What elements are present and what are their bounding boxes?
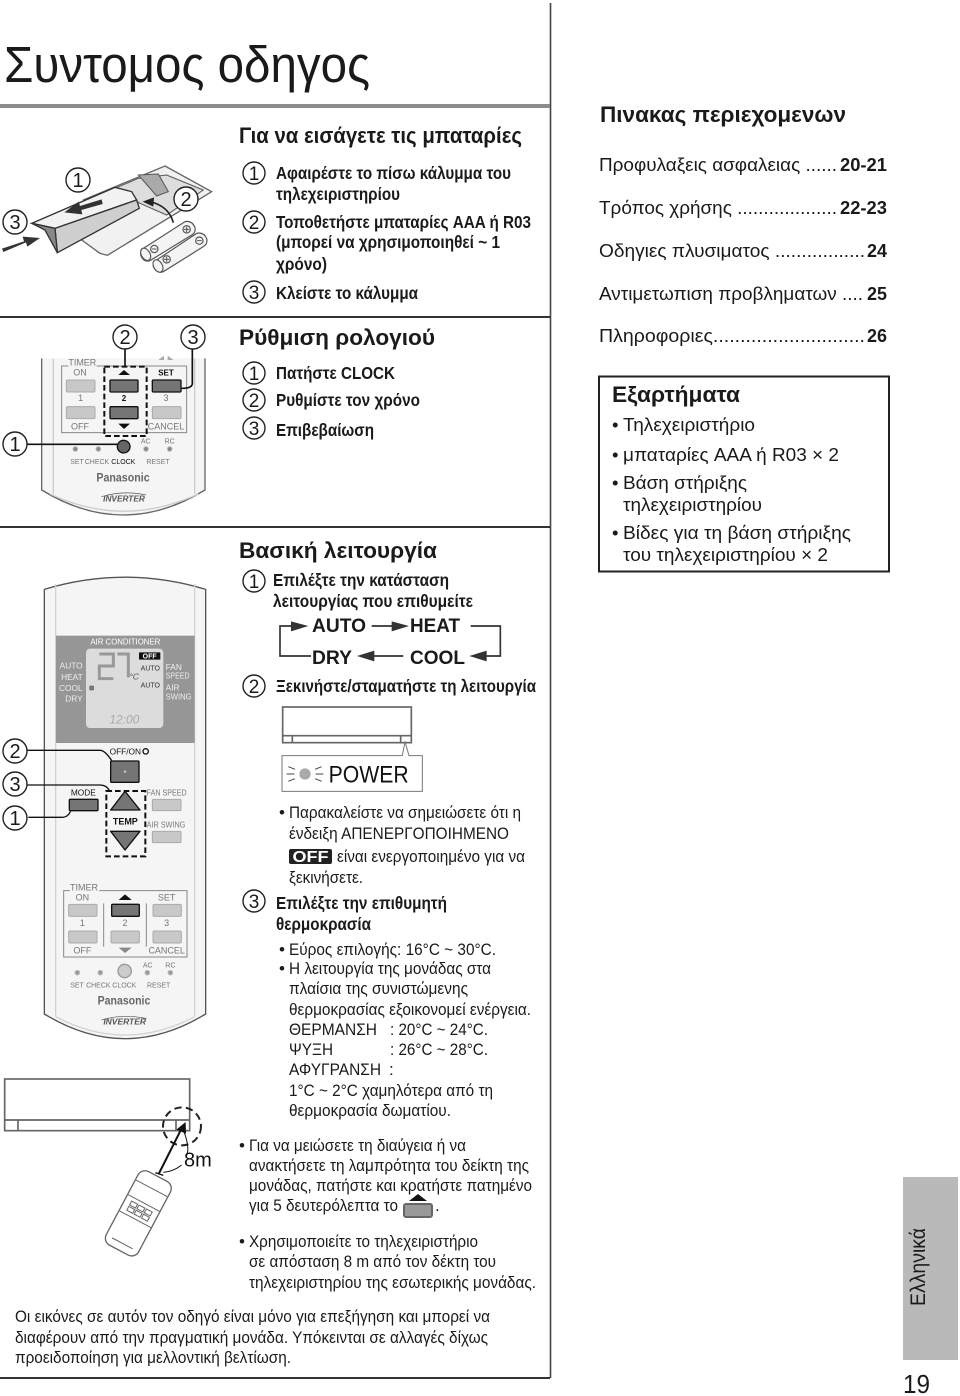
panel: accessories [599, 376, 889, 572]
table of contents: Οδηγιες πλυσιματος ................. [599, 240, 865, 261]
temperature notes: ΨΥΞΗ [289, 1040, 333, 1059]
table of contents: 22-23 [840, 197, 887, 218]
callout 1 [3, 432, 27, 456]
panel: accessories: Τηλεχειριστήριο [623, 414, 755, 435]
callout 2 [174, 187, 198, 211]
temperature notes: : [389, 1060, 394, 1079]
illustration: clock setting remote: ON [73, 368, 87, 378]
clock steps: 3 [249, 419, 259, 440]
battery steps: τηλεχειριστηρίου [276, 184, 400, 204]
callout 2: 2 [119, 327, 131, 349]
footnote: Οι εικόνες σε αυτόν τον οδηγό είναι μόνο για επεξήγηση και μπορεί να [15, 1307, 490, 1326]
illustration: main remote, upper part: °C [129, 671, 140, 681]
illustration: main remote, lower part: INVERTER [103, 1018, 146, 1027]
illustration: main remote, lower part: CANCEL [148, 945, 185, 955]
table of contents: 26 [867, 325, 887, 346]
panel: accessories: • [612, 414, 618, 435]
note: brightness: Για να μειώσετε τη διαύγεια ή να [249, 1136, 466, 1155]
callout 3 [3, 210, 27, 234]
illustration: main remote, lower part: OFF [73, 945, 92, 955]
illustration: clock setting remote: RESET [146, 459, 170, 466]
title: Συντομος οδηγος [4, 36, 370, 93]
language tab [903, 1177, 958, 1360]
temperature notes: Η λειτουργία της μονάδας στα [289, 959, 491, 978]
illustration: main remote, upper part: HEAT [61, 672, 83, 682]
callout 3: 3 [9, 212, 21, 234]
illustration: main remote, upper part: AIR [166, 683, 180, 693]
callout 1: 1 [9, 434, 21, 456]
clock steps: 2 [249, 391, 259, 412]
power note: Παρακαλείστε να σημειώσετε ότι η [289, 803, 521, 822]
illustration: clock setting remote: AC [141, 438, 151, 445]
illustration: main remote, lower part: SET [70, 983, 85, 990]
illustration: main remote, upper part: 12:00 [109, 713, 140, 727]
illustration: inserting batteries [2, 166, 212, 274]
operation step 2: Ξεκινήστε/σταματήστε τη λειτουργία [276, 676, 536, 696]
callout 3 [3, 772, 27, 796]
table of contents: 24 [867, 240, 888, 261]
battery steps: 3 [249, 283, 259, 304]
battery steps: 2 [249, 213, 259, 234]
illustration: indoor unit with POWER indicator [282, 707, 422, 791]
note: range: σε απόσταση 8 m από τον δέκτη του [249, 1252, 496, 1271]
temperature notes: • [279, 959, 285, 978]
heading: batteries: Για να εισάγετε τις μπαταρίες [239, 123, 522, 148]
illustration: clock setting remote: SET [70, 459, 85, 466]
illustration: main remote, upper part: SPEED [166, 670, 190, 680]
battery steps: 1 [249, 164, 259, 185]
illustration: clock setting remote: Panasonic [96, 470, 150, 484]
illustration: remote range 8 m [5, 1079, 212, 1259]
note: range: • [239, 1232, 245, 1251]
illustration: main remote, lower part: Panasonic [98, 994, 151, 1008]
operation step 2: 2 [249, 677, 259, 698]
operation step 3 [243, 890, 447, 934]
mode cycle diagram [280, 615, 500, 669]
illustration: main remote, lower part: RESET [147, 983, 171, 990]
operation step 3: Επιλέξτε την επιθυμητή [276, 893, 447, 914]
illustration: indoor unit with POWER indicator: POWER [329, 762, 409, 789]
temperature notes: θερμοκρασία δωματίου. [289, 1101, 451, 1120]
note: brightness: μονάδας, πατήστε και κρατήστε πατημένο [249, 1176, 532, 1195]
batteries [139, 221, 207, 274]
illustration: clock setting remote: INVERTER [103, 494, 145, 503]
illustration: main remote, upper part: FAN [166, 662, 182, 672]
callout 1: 1 [9, 808, 21, 830]
illustration: main remote, upper part: MODE [71, 787, 96, 797]
note: range: Χρησιμοποιείτε το τηλεχειριστήριο [249, 1232, 478, 1251]
heading: clock: Ρύθμιση ρολογιού [239, 325, 435, 350]
illustration: clock setting remote: 2 [122, 394, 127, 403]
illustration: clock setting remote: 1 [78, 393, 83, 403]
illustration: main remote, lower part: 1 [80, 918, 85, 928]
temperature notes [279, 940, 531, 1120]
panel: accessories: Βάση στήριξης [623, 472, 747, 493]
illustration: clock setting remote: 3 [163, 393, 168, 403]
heading: basic operation: Βασική λειτουργία [239, 538, 437, 563]
table of contents [599, 154, 888, 346]
note: range: τηλεχειριστηρίου της εσωτερικής μονάδας. [249, 1273, 536, 1292]
illustration: main remote, lower part [44, 860, 206, 1039]
illustration: main remote, lower part: AC [143, 962, 153, 969]
note: brightness: ανακτήσετε τη λαμπρότητα του δείκτη της [249, 1156, 529, 1175]
illustration: clock setting remote: CLOCK [111, 459, 136, 466]
note: brightness: • [239, 1136, 245, 1155]
panel: accessories: • [612, 522, 618, 543]
operation step 1 [243, 570, 474, 611]
illustration: main remote, lower part: 2 [122, 918, 127, 928]
temperature notes: : 20°C ~ 24°C. [390, 1020, 488, 1039]
temperature notes: πλαίσια της συνιστώμενης [289, 979, 468, 998]
arrow 1 [64, 199, 103, 214]
illustration: main remote, upper part: DRY [65, 694, 83, 704]
illustration: clock setting remote [27, 348, 205, 515]
callout 2 [113, 325, 137, 349]
leader lines [27, 348, 192, 444]
illustration: main remote, upper part: SWING [166, 691, 192, 701]
note: range [239, 1232, 536, 1292]
illustration: main remote, lower part: RC [165, 962, 175, 969]
segment display 27 [99, 654, 128, 679]
table of contents: Προφυλαξεις ασφαλειας ...... [599, 154, 837, 175]
clock steps [243, 362, 420, 440]
illustration: main remote, lower part: 3 [164, 918, 169, 928]
clock steps: Ρυθμίστε τον χρόνο [276, 390, 420, 410]
illustration: main remote, upper part: AIR CONDITIONER [90, 638, 161, 647]
panel: accessories: Βίδες για τη βάση στήριξης [623, 522, 851, 543]
illustration: clock setting remote: TIMER [68, 357, 97, 367]
table of contents: 20-21 [840, 154, 887, 175]
illustration: main remote, upper part: COOL [59, 683, 83, 693]
callout 3: 3 [9, 774, 21, 796]
illustration: clock setting remote: CHECK [85, 459, 110, 466]
note: brightness: για 5 δευτερόλεπτα το [249, 1196, 398, 1215]
note: brightness: . [435, 1196, 440, 1215]
callout 3 [181, 325, 205, 349]
power note: • [279, 803, 285, 822]
illustration: main remote, lower part: CLOCK [112, 983, 137, 990]
temperature notes: ΘΕΡΜΑΝΣΗ [289, 1020, 377, 1039]
panel: accessories: Εξαρτήματα [612, 382, 740, 407]
callout 1 [3, 806, 27, 830]
note: brightness [239, 1136, 532, 1217]
illustration: main remote, lower part: CHECK [86, 983, 111, 990]
battery steps: (μπορεί να χρησιμοποιηθεί ~ 1 [276, 232, 500, 252]
callout 2: 2 [180, 189, 192, 211]
footnote: προειδοποίηση για μελλοντική βελτίωση. [15, 1348, 291, 1367]
illustration: main remote, upper part [27, 577, 206, 860]
arrow 3 [2, 237, 40, 252]
mode cycle diagram: DRY [312, 647, 352, 669]
mode cycle diagram: HEAT [410, 615, 460, 637]
illustration: main remote, upper part: TEMP [113, 817, 138, 827]
power note [279, 803, 525, 887]
illustration: main remote, lower part: SET [158, 893, 176, 903]
power note: είναι ενεργοποιημένο για να [337, 847, 525, 866]
language tab: Ελληνικά [907, 1228, 930, 1306]
battery steps: χρόνο) [276, 254, 327, 274]
temperature notes: θερμοκρασίας εξοικονομεί ενέργεια. [289, 1000, 531, 1019]
table of contents: 25 [867, 283, 887, 304]
illustration: main remote, lower part: ON [76, 893, 89, 903]
callout 3: 3 [187, 327, 199, 349]
clock steps: Επιβεβαίωση [276, 420, 374, 440]
panel: accessories: μπαταρίες AAA ή R03 × 2 [623, 444, 839, 465]
callout 2 [3, 739, 27, 763]
illustration: main remote, upper part: AUTO [141, 665, 161, 672]
operation step 1: Επιλέξτε την κατάσταση [273, 570, 449, 591]
power note: ξεκινήσετε. [289, 868, 363, 887]
clock steps: Πατήστε CLOCK [276, 363, 395, 383]
callout 1 [66, 168, 90, 192]
panel: accessories: τηλεχειριστηρίου [623, 494, 762, 515]
callout 1: 1 [72, 170, 84, 192]
battery steps [243, 162, 531, 304]
table of contents: Τρόπος χρήσης ................... [599, 197, 837, 218]
temperature notes: • [279, 940, 285, 959]
illustration: main remote, upper part: AIR SWING [147, 820, 185, 829]
callout 2: 2 [9, 741, 21, 763]
illustration: remote range 8 m: 8m [184, 1150, 212, 1172]
illustration: clock setting remote: CANCEL [148, 422, 184, 432]
operation step 1: λειτουργίας που επιθυμείτε [273, 591, 474, 611]
table of contents: Πληροφοριες............................ [599, 325, 865, 346]
operation step 3: θερμοκρασία [276, 914, 371, 934]
temperature notes: Εύρος επιλογής: 16°C ~ 30°C. [289, 940, 496, 959]
temperature notes: 1°C ~ 2°C χαμηλότερα από τη [289, 1081, 493, 1100]
mode cycle diagram: AUTO [312, 615, 366, 637]
operation step 1: 1 [249, 572, 259, 593]
illustration: main remote, upper part: AUTO [141, 682, 161, 689]
illustration: clock setting remote: RC [165, 438, 175, 445]
illustration: main remote, upper part: AUTO [60, 661, 83, 671]
footnote: διαφέρουν από την πραγματική μονάδα. Υπόκεινται σε αλλαγές δίχως [15, 1328, 488, 1347]
heading: contents: Πινακας περιεχομενων [600, 102, 846, 127]
operation step 3: 3 [249, 892, 259, 913]
clock steps: 1 [249, 364, 259, 385]
operation step 2 [243, 675, 536, 698]
illustration: clock setting remote: SET [158, 369, 174, 378]
temperature notes: ΑΦΥΓΡΑΝΣΗ [289, 1060, 381, 1079]
footnote [15, 1307, 490, 1367]
mode cycle diagram: COOL [410, 647, 465, 669]
temperature notes: : 26°C ~ 28°C. [390, 1040, 488, 1059]
illustration: main remote, upper part: OFF/ON [110, 746, 141, 756]
panel: accessories: • [612, 472, 618, 493]
remote body [82, 166, 212, 255]
battery steps: Αφαιρέστε το πίσω κάλυμμα του [276, 163, 511, 183]
leader lines [27, 750, 112, 817]
curved arrow [150, 202, 173, 223]
battery cover [32, 187, 137, 228]
power note: OFF [292, 849, 329, 866]
battery steps: Τοποθετήστε μπαταρίες AAA ή R03 [276, 212, 531, 232]
illustration: main remote, upper part: OFF [143, 654, 157, 661]
illustration: clock setting remote: OFF [71, 422, 89, 432]
illustration: main remote, upper part: FAN SPEED [147, 788, 187, 797]
panel: accessories: του τηλεχειριστηρίου × 2 [623, 544, 828, 565]
panel: accessories: • [612, 444, 618, 465]
table of contents: Αντιμετωπιση προβληματων .... [599, 283, 863, 304]
illustration: main remote, lower part: TIMER [70, 883, 98, 893]
battery steps: Κλείστε το κάλυμμα [276, 283, 418, 303]
power note: ένδειξη ΑΠΕΝΕΡΓΟΠΟΙΗΜΕΝΟ [289, 824, 509, 843]
